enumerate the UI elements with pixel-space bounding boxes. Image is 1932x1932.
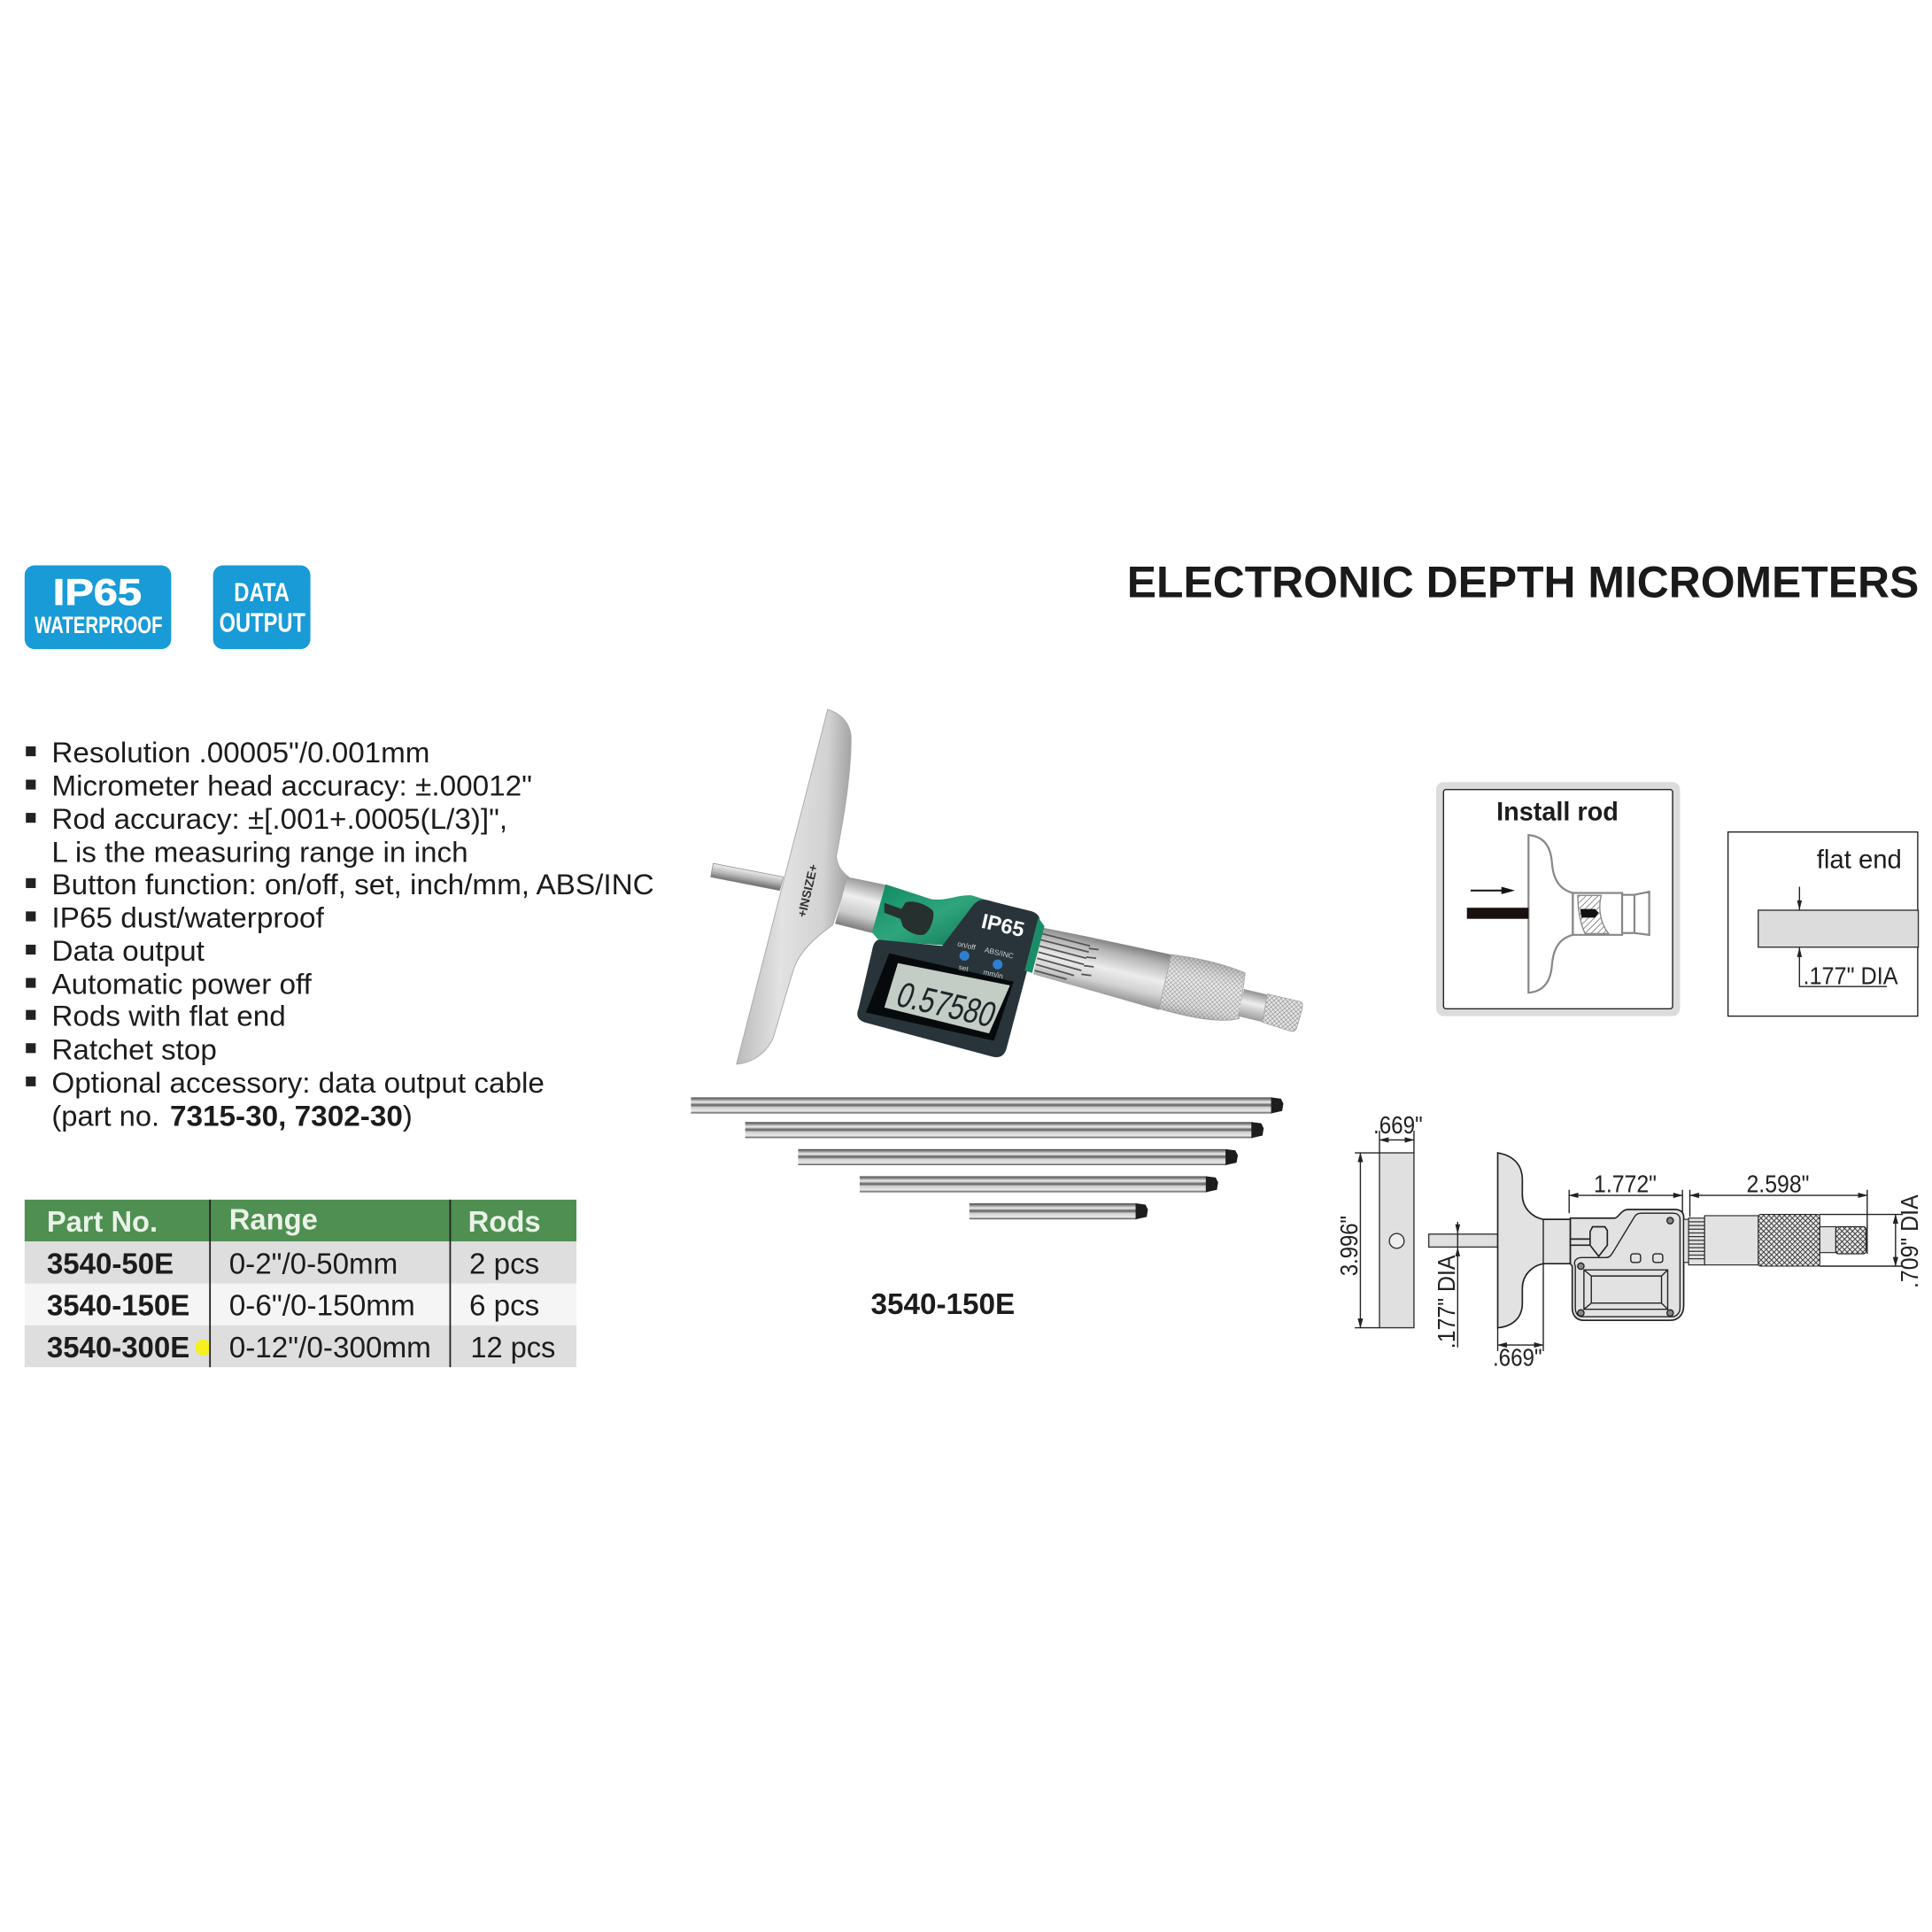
feature list: Ratchet stop [51,1032,217,1065]
table: part numbers [25,1200,576,1367]
knurled thimble [1159,954,1245,1020]
black rod [1467,908,1528,919]
side view [1335,1111,1423,1328]
buttons: mm/in [983,968,1004,980]
base blade [737,709,851,1064]
stem [1429,1234,1498,1247]
dimension [1797,887,1898,989]
table: part numbers: Range [229,1203,318,1236]
clamp key [885,901,933,935]
table: part numbers: 12 pcs [470,1332,555,1364]
feature list: Rod accuracy: ±[.001+.0005(L/3)]", [51,802,507,835]
table: part numbers: 2 pcs [469,1248,539,1280]
feature list: Button function: on/off, set, inch/mm, ABS/INC [51,868,654,900]
table: part numbers: 0-2"/0-50mm [229,1248,398,1280]
replacement rods [691,1097,1283,1219]
key [1571,1226,1607,1256]
side view: .669" [1373,1111,1423,1139]
feature list: ) [403,1099,413,1132]
dimension drawing [1335,1111,1923,1372]
feature list: IP65 dust/waterproof [51,900,325,933]
dimension: .177 DIA: .177" DIA [1433,1255,1460,1349]
green head [872,885,995,946]
badge: IP65 waterproof: IP65 [53,571,142,613]
feature list [26,736,654,1132]
spindle sleeve [1033,927,1171,1010]
dimension: 1.772: 1.772" [1594,1171,1657,1198]
label: flat end [1817,846,1902,875]
LCD screen [885,963,1010,1033]
title: ELECTRONIC DEPTH MICROMETERS [1127,558,1919,607]
buttons [956,939,1015,980]
panel heading: Install rod [1496,798,1619,826]
dimension: 2.598 [1690,1171,1867,1254]
buttons: on/off [956,939,977,952]
badge: data output [213,565,311,649]
product label: 3540-150E [870,1288,1015,1321]
dimension: 1.772 [1569,1171,1682,1213]
product photo: digital depth micrometer [711,709,1302,1064]
table: part numbers: 3540-50E [47,1248,174,1280]
display head [1571,1209,1684,1320]
panel: flat end detail [1728,832,1919,1016]
sleeve threads and graduations [1034,933,1099,979]
ratchet stop [1238,989,1302,1032]
feature list: Automatic power off [51,968,313,1001]
table: part numbers: 6 pcs [469,1290,539,1323]
table: part numbers: 0-12"/0-300mm [229,1332,431,1364]
LCD bezel [866,954,1014,1040]
table: part numbers: Rods [468,1206,541,1239]
dimension: 2.598: 2.598" [1747,1171,1809,1198]
insertion arrow [1471,887,1515,894]
rod inside socket [1580,909,1599,917]
badge: data output: DATA [234,579,290,607]
side view: 3.996" [1335,1216,1363,1276]
barrel [835,877,889,933]
dark display body [857,900,1039,1057]
feature list: 7315-30, 7302-30 [170,1099,403,1132]
head outline [1573,892,1650,935]
feature list: Data output [51,934,205,967]
buttons: set [958,962,970,973]
dimension: .709 DIA [1820,1194,1923,1288]
badge: IP65 waterproof [25,565,171,649]
dimension: bottom .669: .669" [1493,1344,1542,1372]
LCD reading: 0.57580 [892,974,1002,1035]
feature list: L is the measuring range in inch [51,836,468,869]
feature list: (part no. [51,1099,159,1132]
badge: data output: OUTPUT [220,608,305,638]
rod end [1758,910,1919,947]
screen [1584,1270,1667,1310]
feature list: Optional accessory: data output cable [51,1066,545,1099]
feature list: Resolution .00005"/0.001mm [51,736,429,769]
base front view [1498,1153,1571,1328]
feature list: Rods with flat end [51,1000,286,1032]
screws [1667,1217,1673,1224]
dimension: .709 DIA: .709" DIA [1896,1194,1923,1288]
buttons: ABS/INC [984,945,1015,961]
table: part numbers: Part No. [47,1206,158,1239]
table: part numbers: 3540-300E [47,1332,189,1364]
table: part numbers: 0-6"/0-150mm [229,1290,415,1323]
base vertical edge [1542,1219,1544,1264]
brand mark on blade: +INSIZE+ [794,862,820,919]
badge: IP65 waterproof: WATERPROOF [35,612,163,638]
graduated sleeve and thimble [1684,1215,1866,1266]
buttons [1631,1254,1641,1263]
feature list: Micrometer head accuracy: ±.00012" [51,769,532,802]
panel: install rod [1440,785,1676,1012]
dimension: .177" DIA [1803,962,1898,989]
green band by sleeve [1024,917,1045,973]
hatched section [1578,895,1609,933]
yellow marker [195,1340,212,1356]
base outline [1528,835,1573,993]
dimension: bottom .669 [1493,1264,1543,1372]
IP65 mark: IP65 [979,910,1026,942]
rod stub [711,863,784,891]
table: part numbers: 3540-150E [47,1290,189,1323]
